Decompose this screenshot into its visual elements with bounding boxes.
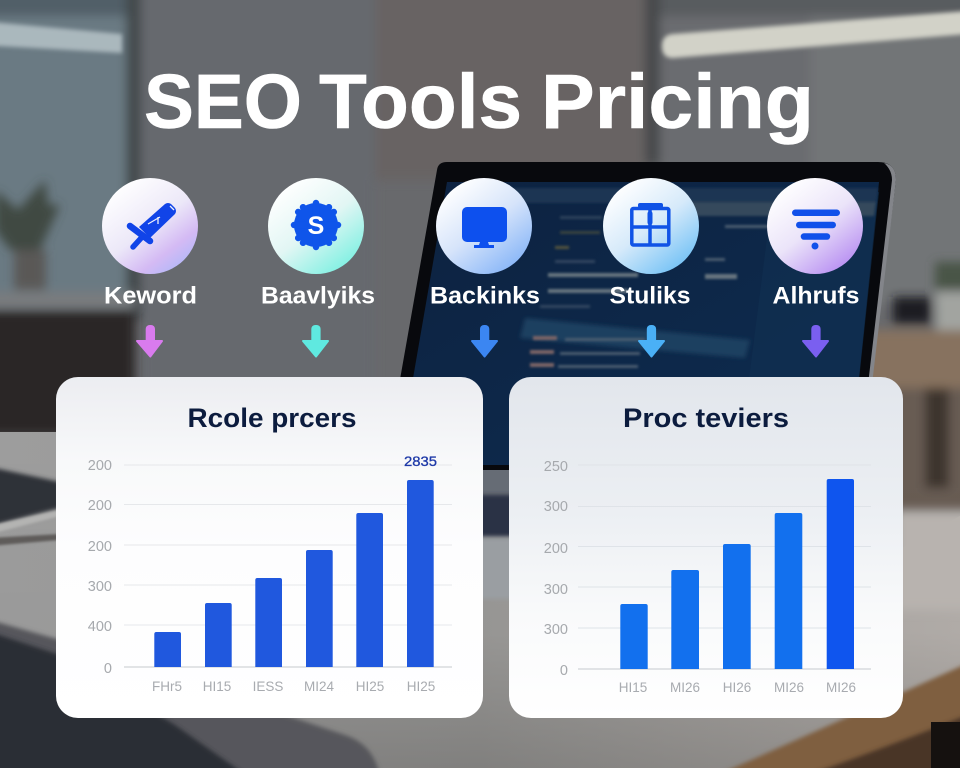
bar chart: 300: [544, 499, 568, 515]
wood edge and leg: [695, 660, 960, 768]
bar chart: MI26: [826, 680, 856, 695]
plant and shelf: [0, 180, 960, 513]
bar chart: 0: [560, 663, 568, 679]
bar chart: 300: [544, 622, 568, 638]
tool: Keword: [102, 178, 198, 356]
bar chart: IESS: [253, 679, 283, 694]
bar chart: 0: [104, 661, 112, 677]
label: Baavlyiks: [261, 282, 375, 310]
bar chart: HI15: [619, 680, 647, 695]
foreground laptop: [0, 620, 380, 768]
bar chart: 200: [88, 458, 112, 474]
tool: Alhrufs: [767, 178, 863, 356]
laptop lid: [384, 162, 896, 470]
bar chart: 200: [544, 541, 568, 557]
bar chart: 200: [88, 498, 112, 514]
bar chart: MI24: [304, 679, 334, 694]
bar chart: 250: [544, 459, 568, 475]
label: Keword: [104, 282, 197, 310]
arrow: [137, 325, 162, 356]
bar chart: [88, 454, 452, 694]
bar chart: 200: [88, 539, 112, 555]
bar chart: HI25: [407, 679, 435, 694]
bar chart: [544, 459, 871, 695]
heading: Proc teviers: [623, 403, 789, 433]
bar chart: HI25: [356, 679, 384, 694]
title: Pricing: [541, 59, 814, 145]
icon: window grid: [603, 178, 699, 274]
label: Stuliks: [610, 282, 690, 310]
arrow: [303, 325, 328, 356]
panel: right chart: [509, 377, 903, 718]
icon: gear: [268, 178, 364, 274]
tool: Stuliks: [603, 178, 699, 356]
icon: sword-shaped pencil: [102, 178, 198, 274]
bar chart: 2835: [404, 454, 437, 469]
label: Backinks: [430, 282, 540, 310]
bar chart: 300: [544, 582, 568, 598]
title: [144, 59, 814, 145]
laptop base: [390, 465, 860, 497]
bar chart: 300: [88, 579, 112, 595]
icon: funnel lines: [767, 178, 863, 274]
icon: monitor: [436, 178, 532, 274]
tool: Backinks: [430, 178, 540, 356]
ceiling lights: [0, 21, 122, 53]
title: SEO: [144, 59, 302, 145]
heading: Rcole prcers: [188, 403, 356, 433]
icon: gear: S: [308, 212, 324, 240]
bar chart: HI26: [723, 680, 751, 695]
tablet on left of desk: [0, 467, 60, 526]
arrow: [639, 325, 664, 356]
bar chart: MI26: [774, 680, 804, 695]
bar chart: FHr5: [152, 679, 182, 694]
arrow: [472, 325, 497, 356]
arrow: [803, 325, 828, 356]
tool: Baavlyiks: [261, 178, 375, 356]
blurred screen rows: [530, 216, 775, 368]
desk: [0, 432, 960, 768]
title: Tools: [319, 59, 522, 145]
bar chart: 400: [88, 619, 112, 635]
label: Alhrufs: [772, 282, 860, 310]
bar chart: MI26: [670, 680, 700, 695]
panel: left chart: [56, 377, 483, 718]
bar chart: HI15: [203, 679, 231, 694]
